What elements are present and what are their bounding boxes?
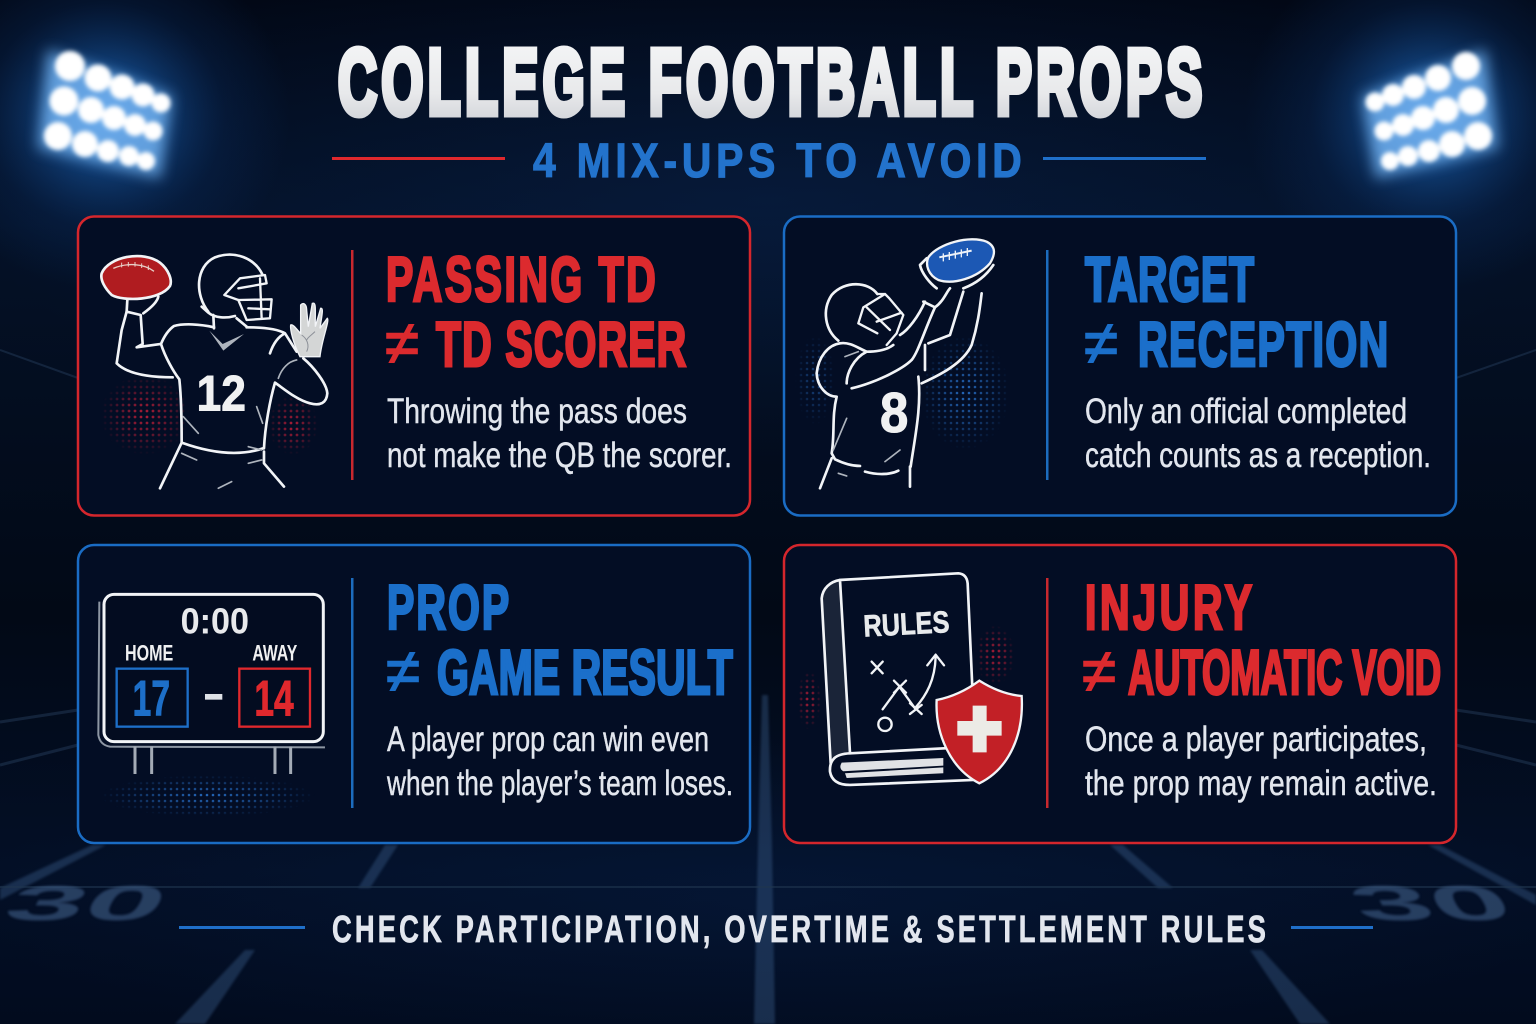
icon: rule book with shield: RULES: [863, 605, 950, 644]
description: A player prop can win even: [387, 720, 709, 759]
description: Once a player participates,: [1085, 720, 1427, 759]
icon: quarterback throwing: [101, 255, 328, 488]
halftone dots blue: [795, 335, 1010, 450]
stadium lights right: [1245, 0, 1536, 290]
description: Only an official completed: [1085, 392, 1407, 431]
subtitle with rules: [332, 135, 1206, 188]
heading: AUTOMATIC VOID: [1128, 637, 1441, 707]
description: [1085, 392, 1431, 475]
heading: ≠: [385, 309, 419, 378]
heading: RECEPTION: [1138, 310, 1388, 380]
description: when the player’s team loses.: [386, 764, 733, 803]
icon: scoreboard: HOME: [125, 641, 173, 666]
heading: ≠: [1084, 309, 1118, 378]
heading: [1084, 245, 1388, 380]
heading: INJURY: [1085, 573, 1252, 643]
heading: [386, 573, 733, 708]
panel: target vs reception: [784, 216, 1456, 516]
heading: GAME RESULT: [437, 638, 733, 708]
description: Throwing the pass does: [387, 392, 687, 431]
icon: scoreboard: 17: [133, 671, 170, 727]
panel: passing TD vs TD scorer: [78, 216, 750, 516]
heading: TARGET: [1085, 245, 1254, 315]
heading: [385, 245, 686, 380]
heading: PROP: [387, 573, 509, 643]
heading: PASSING TD: [386, 245, 656, 315]
footer note with rules: CHECK PARTICIPATION, OVERTIME & SETTLEMENT RULES: [332, 909, 1266, 951]
icon: rule book with shield: [822, 573, 1022, 785]
icon: scoreboard: 14: [254, 671, 294, 727]
heading: [1082, 573, 1441, 707]
icon: receiver catching ball: 8: [880, 382, 908, 445]
heading: ≠: [1082, 637, 1116, 706]
halftone dots red: [100, 375, 318, 455]
panel: prop vs game result: [78, 545, 750, 843]
description: not make the QB the scorer.: [387, 436, 732, 475]
description: catch counts as a reception.: [1085, 436, 1431, 475]
panel: injury vs automatic void: [784, 545, 1456, 843]
icon: quarterback throwing: 12: [197, 366, 246, 422]
description: the prop may remain active.: [1085, 764, 1437, 803]
heading: TD SCORER: [436, 310, 686, 380]
stadium lights left: [0, 0, 290, 290]
icon: scoreboard: AWAY: [252, 641, 298, 666]
background: night stadium field: 30: [1338, 876, 1523, 931]
icon: scoreboard: [98, 594, 325, 774]
description: [1085, 720, 1437, 803]
description: [386, 720, 733, 803]
subtitle with rules: 4 MIX-UPS TO AVOID: [533, 135, 1022, 188]
title: COLLEGE FOOTBALL PROPS: [338, 31, 1202, 135]
heading: ≠: [386, 637, 420, 706]
halftone dots blue: [106, 776, 310, 814]
icon: scoreboard: 0:00: [181, 600, 249, 641]
icon: receiver catching ball: [817, 239, 994, 488]
halftone dots red: [797, 625, 1015, 730]
description: [387, 392, 732, 475]
